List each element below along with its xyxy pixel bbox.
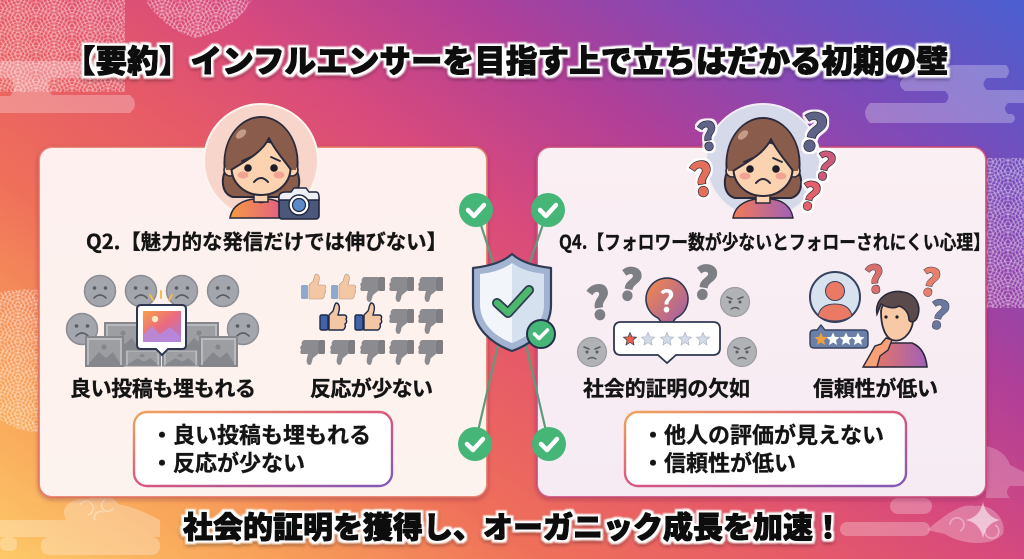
summary box right: ・他人の評価が見えない bbox=[642, 418, 884, 450]
panel: right card bbox=[537, 92, 990, 497]
icon: missing social proof rating: ? bbox=[582, 267, 615, 333]
icon: low trust profile and thinking man: ? bbox=[861, 249, 888, 305]
avatar: confused woman with question marks: ? bbox=[795, 166, 826, 223]
label: low credibility: 信頼性が低い bbox=[813, 373, 938, 403]
summary box right bbox=[625, 412, 906, 486]
label: few reactions: 反応が少ない bbox=[310, 373, 433, 403]
label: buried posts: 良い投稿も埋もれる bbox=[70, 373, 256, 403]
avatar: confused woman with question marks: ? bbox=[793, 92, 834, 168]
icon: check badge bottom right bbox=[532, 427, 566, 461]
avatar: confused woman with question marks: ? bbox=[693, 106, 722, 162]
avatar: confused woman with question marks: ? bbox=[810, 136, 841, 193]
icon: check badge top left bbox=[459, 193, 493, 227]
central shield with connected checkmarks bbox=[458, 193, 566, 461]
icon: low trust profile and thinking man bbox=[810, 249, 954, 367]
icon: corner sparkle bbox=[966, 502, 1000, 538]
heading: Q2: Q2.【魅力的な発信だけでは伸びない】 bbox=[86, 225, 447, 255]
panel: left card bbox=[39, 104, 487, 497]
icon: shield bbox=[473, 254, 551, 351]
avatar: confused woman with question marks: ? bbox=[684, 142, 719, 211]
icon: missing social proof rating bbox=[578, 246, 756, 366]
icon: low trust profile and thinking man: ? bbox=[925, 284, 954, 341]
icon: check badge top right bbox=[531, 193, 565, 227]
icon: low trust profile and thinking man: ? bbox=[916, 252, 945, 308]
card background bbox=[39, 147, 487, 497]
card background bbox=[537, 147, 986, 497]
icon: check badge bottom left bbox=[458, 427, 492, 461]
icon: shield check badge bbox=[527, 320, 555, 348]
icon: camera bbox=[279, 188, 319, 219]
bottom message: 社会的証明を獲得し、オーガニック成長を加速！ bbox=[183, 503, 843, 547]
label: lack of social proof: 社会的証明の欠如 bbox=[583, 373, 750, 403]
summary box right: ・信頼性が低い bbox=[642, 446, 796, 478]
summary box left bbox=[134, 412, 392, 486]
icon: missing social proof rating: ? bbox=[688, 246, 723, 314]
summary box left: ・良い投稿も埋もれる bbox=[151, 418, 371, 450]
icon: missing social proof rating: ? bbox=[614, 251, 647, 315]
icon: thumbs grid bbox=[300, 274, 443, 365]
avatar: confused woman with question marks bbox=[684, 92, 841, 223]
summary box left: ・反応が少ない bbox=[151, 446, 305, 478]
title: 【要約】インフルエンサーを目指す上で立ちはだかる初期の壁 bbox=[64, 36, 948, 82]
avatar: sad woman with camera bbox=[204, 104, 319, 219]
icon: buried posts among sad faces bbox=[66, 276, 258, 366]
connector lines bbox=[475, 210, 549, 444]
icon: missing social proof rating: ? bbox=[659, 277, 675, 321]
